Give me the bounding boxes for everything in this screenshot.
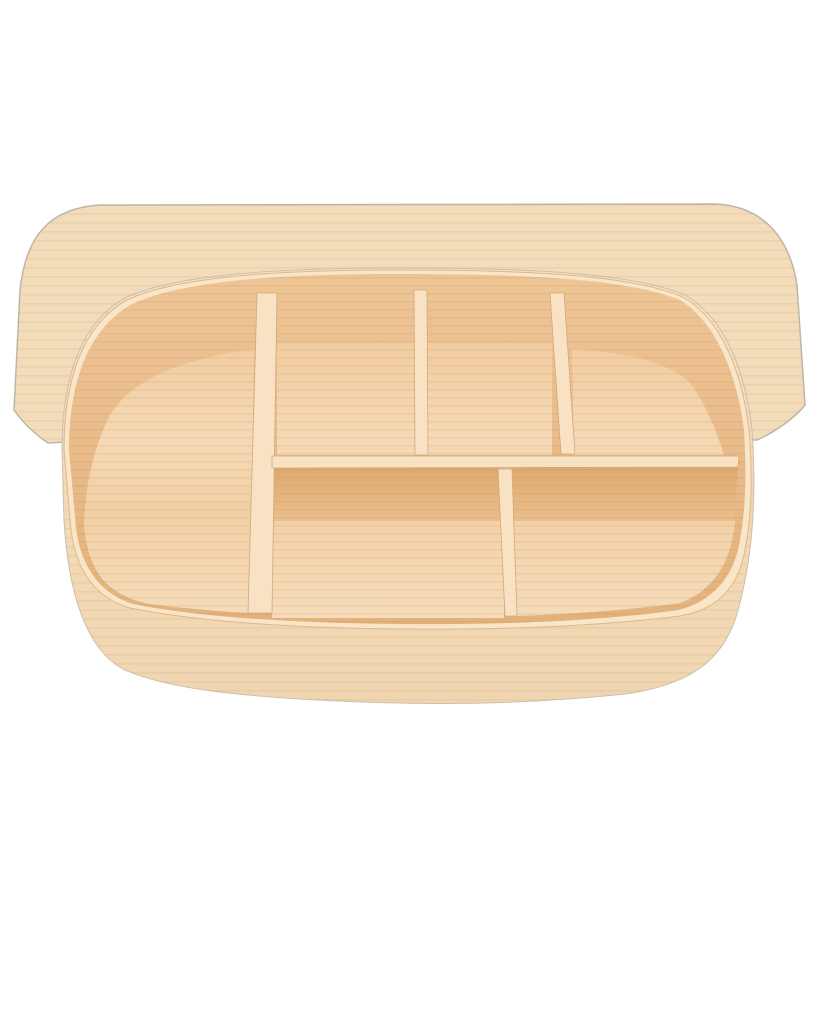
box outer wall xyxy=(62,268,754,703)
box rim xyxy=(64,270,751,629)
inner walls xyxy=(69,274,745,624)
compartment floors xyxy=(84,343,735,618)
dividers xyxy=(248,290,739,616)
lid xyxy=(14,204,805,443)
lower back walls xyxy=(272,467,738,521)
